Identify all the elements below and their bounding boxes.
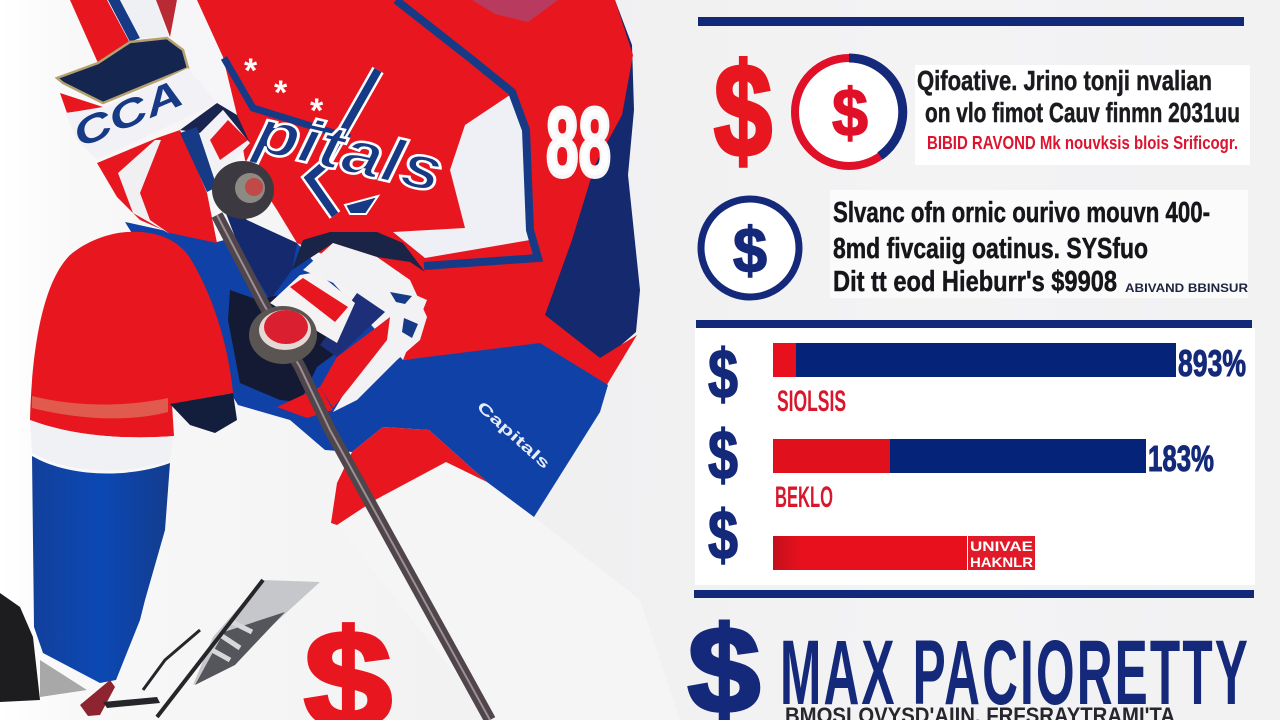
panel: name footer [688, 602, 1250, 720]
hockey stick [217, 215, 490, 720]
icon: navy dollar ring [701, 199, 799, 297]
right glove [249, 232, 427, 412]
jersey navy side panel [535, 0, 640, 360]
chart background [695, 328, 1255, 585]
red jersey torso [197, 0, 637, 388]
text block [833, 197, 1248, 298]
lower torso strip [217, 190, 297, 300]
icon: red dollar: $ [714, 37, 772, 184]
text block [917, 65, 1240, 153]
top divider [698, 17, 1244, 26]
shoulder crest [472, 0, 558, 22]
bar row 3 [708, 496, 1035, 574]
left glove: CCA [67, 73, 189, 156]
skate and boot [0, 580, 320, 717]
bar row 2: BEKLO [775, 481, 833, 514]
number 88: 88 [546, 87, 611, 197]
shorts wordmark: Capitals [473, 398, 553, 473]
text backing [830, 190, 1248, 298]
white sock band [30, 420, 174, 470]
panel: top stat [714, 37, 1250, 184]
capitals logo: * [310, 92, 324, 130]
bar row 2: $ [708, 416, 738, 494]
blue shorts [125, 222, 608, 517]
icon: navy dollar ring: $ [733, 214, 767, 286]
bar row 1 [708, 335, 1246, 418]
icon: dollar ring: $ [832, 75, 868, 151]
bar row 3: HAKNLR [970, 554, 1033, 570]
capitals logo [224, 52, 450, 215]
bar row 1: SIOLSIS [777, 385, 846, 418]
jersey navy trim [396, 0, 538, 266]
left glove [57, 38, 250, 243]
panel: bar chart [695, 328, 1255, 585]
red shorts lower panel [331, 427, 487, 525]
capitals logo: pitals [247, 96, 450, 206]
text block: Dit tt eod Hieburr's $9908 [833, 266, 1117, 298]
text backing [915, 65, 1250, 165]
right glove hand [228, 290, 340, 402]
stick butt knob [212, 161, 274, 219]
text block: 8md fivcaiig oatinus. SYSfuo [833, 233, 1148, 265]
third divider [694, 590, 1254, 598]
knee dark patch [170, 393, 237, 433]
bar row 2 [708, 416, 1214, 514]
bar row 3: $ [708, 496, 738, 574]
bar row 1: $ [708, 335, 738, 413]
capitals logo: * [274, 74, 288, 112]
text block: ABIVAND BBINSUR [1125, 281, 1248, 295]
capitals logo: * [244, 52, 258, 90]
second divider [696, 320, 1252, 328]
bar row 2: 183% [1148, 438, 1214, 479]
raised arm sleeve [70, 0, 237, 115]
red glove under [277, 387, 333, 418]
white sleeve panel [393, 95, 530, 258]
player illustration [0, 0, 640, 720]
red thigh [30, 232, 233, 437]
blue sock [32, 456, 170, 683]
bar row 3: UNIVAE [970, 538, 1033, 554]
panel: second stat [701, 190, 1248, 298]
bar row 1: 893% [1178, 343, 1246, 384]
icon: dollar ring [795, 58, 903, 166]
